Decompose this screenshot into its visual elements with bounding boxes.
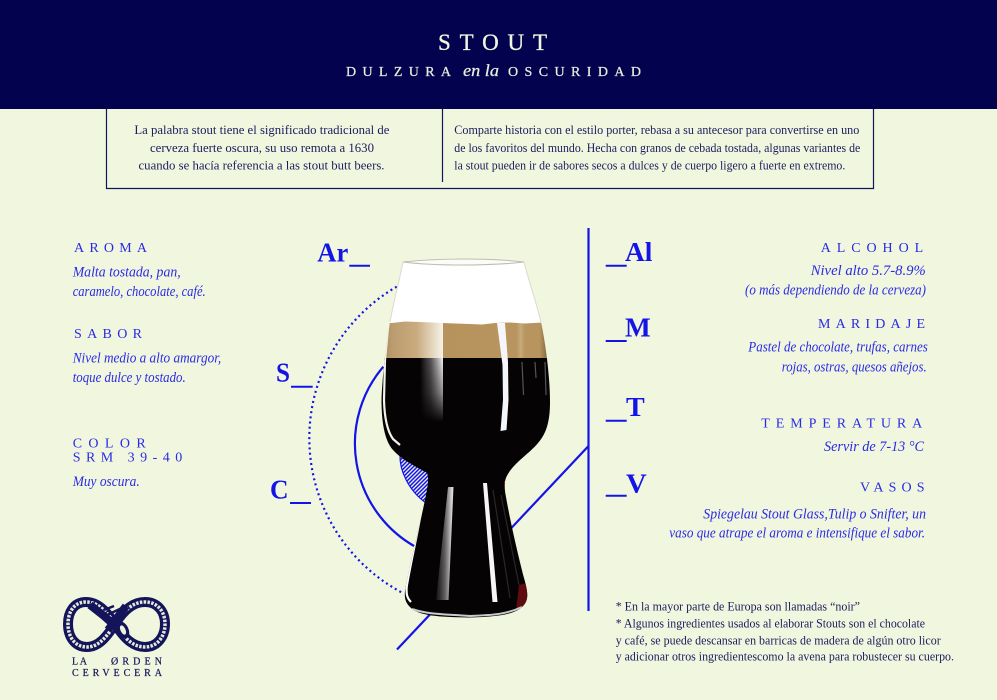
aroma block: AROMA: [74, 241, 148, 256]
stout glass: [375, 255, 555, 623]
intro text left: La palabra stout tiene el significado tradicional de: [134, 122, 390, 137]
dotted arc: [309, 287, 403, 593]
guide lines: [309, 228, 588, 650]
intro text right: [454, 122, 860, 172]
beer highlights: [384, 323, 546, 445]
marker: C: [270, 474, 311, 504]
intro text right: la stout pueden ir de sabores secos a dulces y de cuerpo ligero a fuerte en extremo.: [454, 158, 845, 172]
intro text left: cerveza fuerte oscura, su uso remota a 1630: [150, 140, 374, 155]
sabor block: toque dulce y tostado.: [73, 370, 186, 386]
vasos block: Spiegelau Stout Glass,Tulip o Snifter, un: [703, 506, 926, 522]
sabor block: [72, 327, 221, 386]
marker: Al: Al: [625, 237, 653, 267]
foam: [390, 262, 542, 324]
color block: SRM 39-40: [73, 451, 182, 466]
logo wordmark: ØRDEN: [111, 657, 162, 668]
intro text right: de los favoritos del mundo. Hecha con granos de cebada tostada, algunas variantes de: [454, 140, 860, 155]
marker: V: V: [626, 469, 647, 499]
alcohol block: [745, 241, 926, 298]
marker: Ar: [317, 238, 370, 268]
footnotes: * En la mayor parte de Europa son llamadas “noir”: [616, 599, 860, 614]
logo wordmark: [72, 657, 163, 679]
solid arc: [355, 367, 414, 546]
tan head: [380, 322, 552, 360]
alcohol block: (o más dependiendo de la cerveza): [745, 282, 926, 298]
temperatura block: Servir de 7-13 °C: [824, 439, 925, 455]
marker: T: [606, 392, 645, 422]
marker: Al: [606, 237, 653, 267]
vasos block: [669, 481, 926, 541]
subtitle: OSCURIDAD: [508, 65, 641, 80]
maridaje block: MARIDAJE: [818, 317, 925, 332]
marker: Ar: Ar: [317, 238, 348, 268]
header band: [0, 0, 997, 109]
marker: S: [276, 358, 313, 388]
alcohol block: ALCOHOL: [821, 241, 923, 256]
vertical axis: [587, 228, 590, 611]
dark beer: [375, 358, 555, 623]
marker: M: M: [625, 313, 651, 343]
icon: ouroboros infinity: [68, 602, 165, 647]
marker: M: [606, 313, 651, 343]
marker: S: S: [276, 358, 290, 388]
color block: [72, 436, 182, 490]
title: STOUT: [438, 30, 547, 55]
footnotes: * Algunos ingredientes usados al elaborar Stouts son el chocolate: [616, 616, 925, 631]
vasos block: VASOS: [860, 481, 924, 496]
maridaje block: Pastel de chocolate, trufas, carnes: [747, 340, 928, 356]
marker: C: C: [270, 474, 288, 504]
vasos block: vaso que atrape el aroma e intensifique el sabor.: [669, 525, 925, 541]
temperatura block: [761, 417, 925, 455]
marker: T: T: [626, 392, 645, 422]
sabor block: Nivel medio a alto amargor,: [72, 351, 221, 367]
footnotes: [616, 599, 954, 664]
temperatura block: TEMPERATURA: [761, 417, 923, 432]
intro text left: cuando se hacía referencia a las stout butt beers.: [138, 158, 384, 172]
alcohol block: Nivel alto 5.7-8.9%: [810, 263, 926, 279]
sabor block: SABOR: [74, 327, 143, 342]
footnotes: y café, se puede descansar en barricas de madera de algún otro licor: [616, 632, 941, 647]
stem highlights: [407, 481, 529, 610]
intro text left: [134, 122, 390, 172]
subtitle: en la: [463, 61, 499, 80]
logo wordmark: LA: [72, 657, 88, 668]
marker: V: [606, 469, 647, 499]
maridaje block: [747, 317, 928, 375]
aroma block: caramelo, chocolate, café.: [73, 284, 206, 300]
glass base rim: [412, 607, 522, 616]
subtitle: DULZURA: [346, 65, 452, 80]
logo wordmark: CERVECERA: [72, 668, 163, 679]
left marker labels: [270, 238, 370, 504]
diagonal line: [397, 446, 588, 650]
intro text right: Comparte historia con el estilo porter, rebasa a su antecesor para convertirse en uno: [454, 122, 859, 137]
intro panel: [106, 109, 874, 188]
color block: Muy oscura.: [72, 474, 140, 490]
logo: La Orden Cervecera: [68, 602, 165, 679]
maridaje block: rojas, ostras, quesos añejos.: [782, 359, 927, 375]
glass rim: [403, 259, 524, 265]
color block: COLOR: [73, 436, 146, 451]
aroma block: Malta tostada, pan,: [72, 265, 181, 281]
subtitle: [346, 61, 641, 80]
aroma block: [72, 241, 206, 300]
hatched segment: [400, 448, 440, 503]
footnotes: y adicionar otros ingredientescomo la avena para robustecer su cuerpo.: [616, 649, 954, 664]
